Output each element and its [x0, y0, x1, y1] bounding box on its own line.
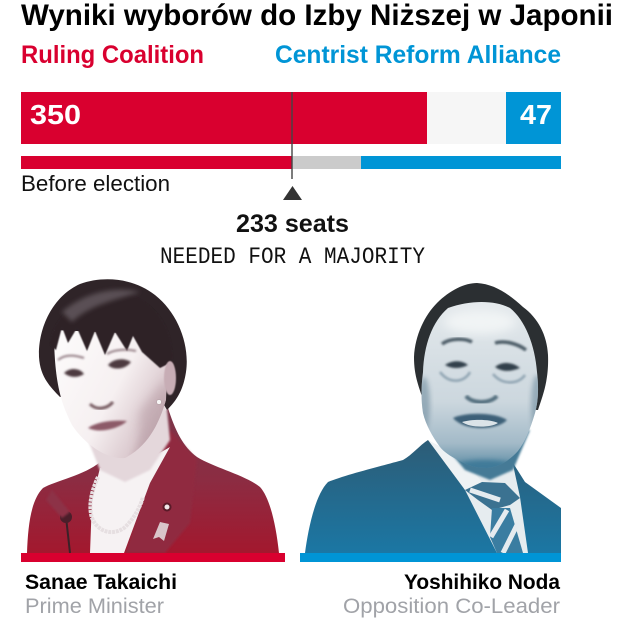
name: Yoshihiko Noda: Yoshihiko Noda	[404, 571, 560, 594]
tie body	[490, 508, 523, 553]
jaw shadow	[136, 380, 166, 448]
portrait: Sanae Takaichi	[27, 279, 279, 553]
suit	[305, 440, 561, 553]
alliance seats: 47	[520, 99, 552, 130]
hair	[414, 283, 548, 410]
role: Opposition Co-Leader: Opposition Co-Leader	[343, 595, 560, 618]
jacket	[27, 408, 279, 553]
ear	[164, 361, 176, 395]
left cheek shade	[422, 376, 432, 428]
majority caption: NEEDED FOR A MAJORITY	[160, 244, 425, 270]
portrait rule: red	[21, 553, 285, 562]
majority marker line	[291, 92, 293, 179]
hair highlight	[62, 290, 140, 322]
brows	[442, 339, 526, 350]
eyes	[64, 359, 131, 377]
mouth	[88, 421, 127, 430]
eyes	[445, 361, 520, 371]
tie knot	[465, 482, 520, 510]
blouse	[90, 447, 170, 553]
before election label: Before election	[21, 171, 170, 196]
chin shade	[460, 458, 508, 468]
name: Sanae Takaichi: Sanae Takaichi	[25, 571, 177, 594]
seat result bar	[21, 92, 561, 144]
majority seats label: 233 seats	[236, 210, 349, 238]
portrait: Yoshihiko Noda	[305, 283, 561, 553]
shirt	[445, 456, 528, 553]
microphone	[66, 517, 70, 553]
legend: centrist reform alliance: Centrist Reform Alliance	[275, 41, 561, 69]
brows	[58, 350, 136, 360]
eye bags	[440, 372, 525, 382]
neck	[88, 400, 170, 482]
neck	[440, 430, 530, 480]
portrait rule: blue	[300, 553, 561, 562]
legend: ruling coalition: Ruling Coalition	[21, 41, 204, 69]
face	[54, 330, 168, 458]
fringe	[50, 293, 172, 368]
mouth	[453, 414, 507, 428]
left collar	[428, 440, 482, 490]
earring	[156, 400, 162, 404]
nose	[466, 396, 497, 402]
tie stripes	[470, 490, 518, 553]
ruling coalition seats: 350	[30, 99, 81, 130]
right cheek shade	[528, 374, 538, 426]
face shading	[422, 311, 538, 468]
lapel pin and badge	[164, 504, 170, 510]
majority marker triangle	[283, 186, 302, 200]
right lapel shade	[125, 430, 197, 553]
pearl necklace	[90, 477, 143, 532]
face	[422, 302, 538, 468]
role: Prime Minister: Prime Minister	[25, 595, 164, 618]
nose	[90, 402, 113, 408]
forehead light	[444, 310, 516, 334]
cheek shading	[136, 380, 166, 448]
before election bar	[21, 156, 561, 169]
hair	[39, 279, 187, 410]
